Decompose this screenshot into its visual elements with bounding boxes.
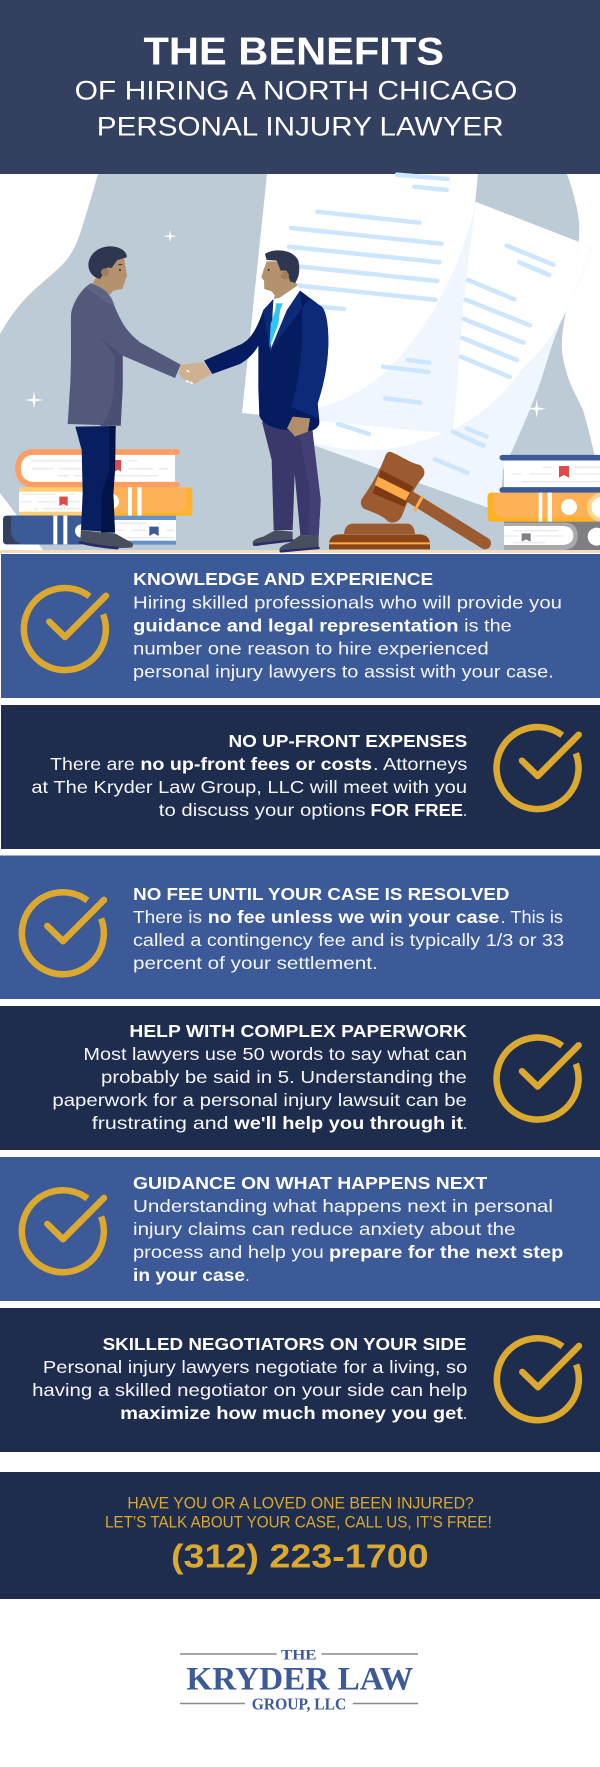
heading: HELP WITH COMPLEX PAPERWORK — [129, 1021, 467, 1041]
body text: having a skilled negotiator on your side can help — [32, 1380, 467, 1400]
shirt — [271, 286, 302, 351]
sparkles — [24, 230, 546, 418]
body text: process and help you — [133, 1242, 324, 1262]
logo: The Kryder Law Group, LLC: KRYDER LAW — [186, 1661, 413, 1697]
floor line — [0, 550, 600, 553]
bottom book — [3, 516, 83, 544]
body text: at The Kryder Law Group, LLC will meet with you — [31, 777, 467, 797]
hair — [265, 250, 299, 283]
books stack right — [488, 458, 600, 550]
body text: Most lawyers use 50 words to say what can — [83, 1044, 467, 1064]
body text: percent of your settlement. — [133, 953, 378, 973]
shoe — [80, 530, 133, 548]
body text: . — [463, 1113, 467, 1133]
body text: in your case — [133, 1265, 245, 1285]
trousers — [75, 426, 116, 533]
body text: There are — [50, 754, 135, 774]
call to action text: LET’S TALK ABOUT YOUR CASE, CALL US, IT’S FREE! — [105, 1514, 492, 1532]
body text: personal injury lawyers to assist with your case. — [133, 661, 554, 681]
panel: help with complex paperwork — [0, 1006, 600, 1150]
panel: no fee until resolved — [0, 856, 600, 999]
body text — [133, 1196, 563, 1285]
body text: There is — [133, 907, 202, 927]
middle book — [19, 487, 86, 516]
body text: paperwork for a personal injury lawsuit can be — [52, 1090, 467, 1110]
body text: frustrating and — [92, 1113, 228, 1133]
tie — [269, 303, 283, 348]
body text — [133, 592, 562, 681]
background blob — [0, 174, 600, 550]
icon: check circle — [497, 1038, 579, 1120]
heading: NO FEE UNTIL YOUR CASE IS RESOLVED — [133, 884, 509, 904]
body text: . This is — [501, 907, 563, 927]
title — [75, 30, 517, 141]
title: THE BENEFITS — [144, 30, 444, 73]
panel: knowledge and experience — [1, 554, 600, 698]
title: PERSONAL INJURY LAWYER — [97, 111, 504, 141]
trousers — [262, 422, 321, 536]
body text: called a contingency fee and is typically 1/3 or 33 — [133, 930, 564, 950]
jacket — [204, 291, 328, 432]
icon: check circle — [497, 1338, 579, 1420]
panel: guidance on what happens next — [0, 1157, 600, 1301]
body text: Personal injury lawyers negotiate for a living, so — [43, 1357, 467, 1377]
heading: NO UP-FRONT EXPENSES — [228, 731, 467, 751]
books stack left — [3, 452, 192, 545]
logo: The Kryder Law Group, LLC — [180, 1647, 418, 1713]
body text: we'll help you through it — [233, 1113, 463, 1133]
body text: maximize how much money you get — [120, 1403, 463, 1423]
body text: FOR FREE — [370, 800, 463, 820]
call to action text: HAVE YOU OR A LOVED ONE BEEN INJURED? — [127, 1495, 474, 1513]
body text: Hiring skilled professionals who will provide you — [133, 592, 562, 612]
paper one — [242, 174, 478, 433]
body text: number one reason to hire experienced — [133, 638, 489, 658]
logo: The Kryder Law Group, LLC: THE — [281, 1647, 316, 1663]
clasped hands — [179, 362, 212, 385]
body text — [32, 1357, 467, 1423]
heading: KNOWLEDGE AND EXPERIENCE — [133, 569, 433, 589]
icon: check circle — [22, 892, 104, 974]
icon: check circle — [497, 727, 579, 809]
body text — [31, 754, 468, 820]
man: client in grey suit — [68, 246, 212, 548]
heading: GUIDANCE ON WHAT HAPPENS NEXT — [133, 1173, 488, 1193]
top book — [18, 452, 177, 485]
body text: . — [463, 1403, 467, 1423]
neck and face — [261, 261, 297, 306]
neck and face — [92, 257, 127, 295]
body text: prepare for the next step — [329, 1242, 563, 1262]
body text: is the — [464, 615, 512, 635]
body text: . — [246, 1265, 250, 1285]
document text lines — [283, 175, 553, 473]
call to action panel — [0, 1472, 600, 1599]
body text: guidance and legal representation — [133, 615, 458, 635]
panel: no up-front expenses — [1, 705, 600, 849]
icon: check circle — [24, 588, 106, 670]
logo: The Kryder Law Group, LLC: GROUP, LLC — [252, 1694, 346, 1713]
illustration: handshake between client and lawyer — [0, 174, 600, 553]
hand — [287, 417, 310, 437]
body text: probably be said in 5. Understanding the — [101, 1067, 467, 1087]
icon: check circle — [22, 1190, 104, 1272]
paper two — [313, 202, 592, 512]
heading: SKILLED NEGOTIATORS ON YOUR SIDE — [103, 1334, 467, 1354]
phone number: (312) 223-1700 — [171, 1538, 429, 1575]
body text: no fee unless we win your case — [208, 907, 500, 927]
title: OF HIRING A NORTH CHICAGO — [75, 75, 517, 105]
body text — [52, 1044, 467, 1133]
body text: . — [463, 800, 467, 820]
body text: . Attorneys — [373, 754, 468, 774]
jacket — [68, 283, 181, 426]
header banner — [0, 0, 600, 174]
man: lawyer in navy suit — [204, 250, 328, 552]
shoes — [253, 530, 293, 546]
body text: no up-front fees or costs — [140, 754, 372, 774]
body text: to discuss your options — [159, 800, 366, 820]
panel: skilled negotiators — [0, 1308, 600, 1452]
body text: Understanding what happens next in personal — [133, 1196, 553, 1216]
body text — [133, 907, 564, 973]
call to action text — [105, 1495, 492, 1532]
hair — [88, 246, 127, 279]
gavel — [329, 452, 485, 549]
body text: injury claims can reduce anxiety about the — [133, 1219, 516, 1239]
